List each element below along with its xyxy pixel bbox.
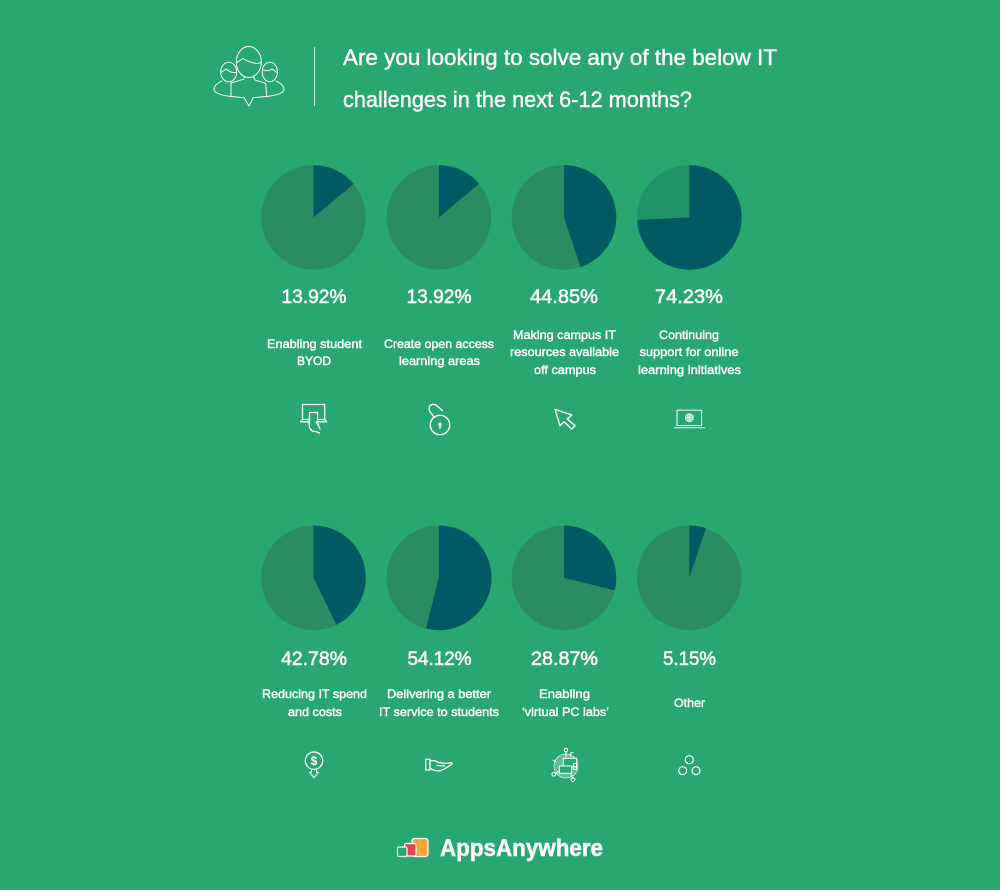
item: Continuing support for online learning initiatives bbox=[637, 165, 742, 428]
icon: laptop with globe bbox=[674, 410, 705, 428]
percentage: 5.15% bbox=[663, 649, 716, 670]
pie chart 13.92% bbox=[261, 165, 366, 270]
label bbox=[384, 337, 494, 368]
pie chart 44.85% bbox=[512, 165, 616, 270]
pie chart 13.92% bbox=[387, 165, 491, 270]
label: Enabling bbox=[539, 687, 590, 701]
icon: dollar with down arrow bbox=[305, 752, 323, 778]
icon: cursor arrow bbox=[555, 409, 575, 429]
percentage: 44.85% bbox=[530, 287, 598, 308]
label bbox=[522, 687, 609, 719]
item: Making campus IT resources available off campus bbox=[510, 165, 619, 429]
title: Are you looking to solve any of the below IT bbox=[343, 45, 777, 70]
label bbox=[379, 687, 499, 719]
icon: three circles bbox=[679, 756, 700, 775]
label: Delivering a better bbox=[387, 687, 491, 701]
pie chart 74.23% bbox=[637, 165, 742, 270]
logo wordmark: AppsAnywhere bbox=[440, 835, 603, 862]
label bbox=[267, 337, 363, 368]
label: learning initiatives bbox=[638, 363, 741, 377]
icon: tablet with hand bbox=[300, 404, 327, 433]
percentage: 28.87% bbox=[531, 649, 598, 670]
label: Other bbox=[674, 696, 705, 710]
label: learning areas bbox=[399, 354, 480, 368]
label: Continuing bbox=[659, 328, 719, 342]
pie chart 42.78% bbox=[261, 526, 366, 630]
item: Enabling student BYOD bbox=[261, 165, 366, 433]
label: Reducing IT spend bbox=[262, 687, 367, 701]
pie chart 28.87% bbox=[512, 526, 616, 630]
pie chart 54.12% bbox=[387, 525, 492, 630]
label: BYOD bbox=[297, 354, 331, 368]
label: resources available bbox=[510, 345, 619, 359]
pie chart 5.15% bbox=[637, 525, 742, 630]
label: Create open access bbox=[384, 337, 494, 351]
label: Enabling student bbox=[267, 337, 363, 351]
icon: dollar with down arrow: $ bbox=[311, 754, 318, 768]
logo mark bbox=[398, 838, 428, 856]
item: Enabling virtual PC labs bbox=[512, 526, 616, 782]
item: Delivering a better IT service to students bbox=[379, 525, 499, 771]
label bbox=[638, 328, 741, 377]
label: IT service to students bbox=[379, 705, 499, 719]
percentage: 13.92% bbox=[406, 287, 472, 308]
title bbox=[343, 45, 777, 112]
logo: AppsAnywhere bbox=[398, 835, 603, 862]
item: Create open access learning areas bbox=[384, 165, 494, 435]
percentage: 13.92% bbox=[282, 287, 347, 308]
label: off campus bbox=[534, 363, 596, 377]
percentage: 74.23% bbox=[655, 287, 723, 308]
icon: connected devices globe bbox=[552, 748, 578, 782]
label bbox=[262, 687, 367, 719]
title: challenges in the next 6-12 months? bbox=[343, 87, 692, 112]
item: Other bbox=[637, 525, 742, 775]
header bbox=[214, 45, 777, 112]
percentage: 54.12% bbox=[408, 649, 472, 670]
percentage: 42.78% bbox=[281, 649, 347, 670]
label: and costs bbox=[288, 705, 342, 719]
label: support for online bbox=[640, 345, 739, 359]
icon: open hand bbox=[426, 759, 452, 771]
label: Making campus IT bbox=[513, 328, 617, 342]
item: Reducing IT spend and costs bbox=[261, 526, 367, 778]
label bbox=[510, 328, 619, 377]
divider line bbox=[314, 47, 315, 106]
label: ‘virtual PC labs’ bbox=[522, 705, 609, 719]
icon: open padlock bbox=[429, 404, 450, 435]
icon: group of people bbox=[214, 46, 284, 106]
